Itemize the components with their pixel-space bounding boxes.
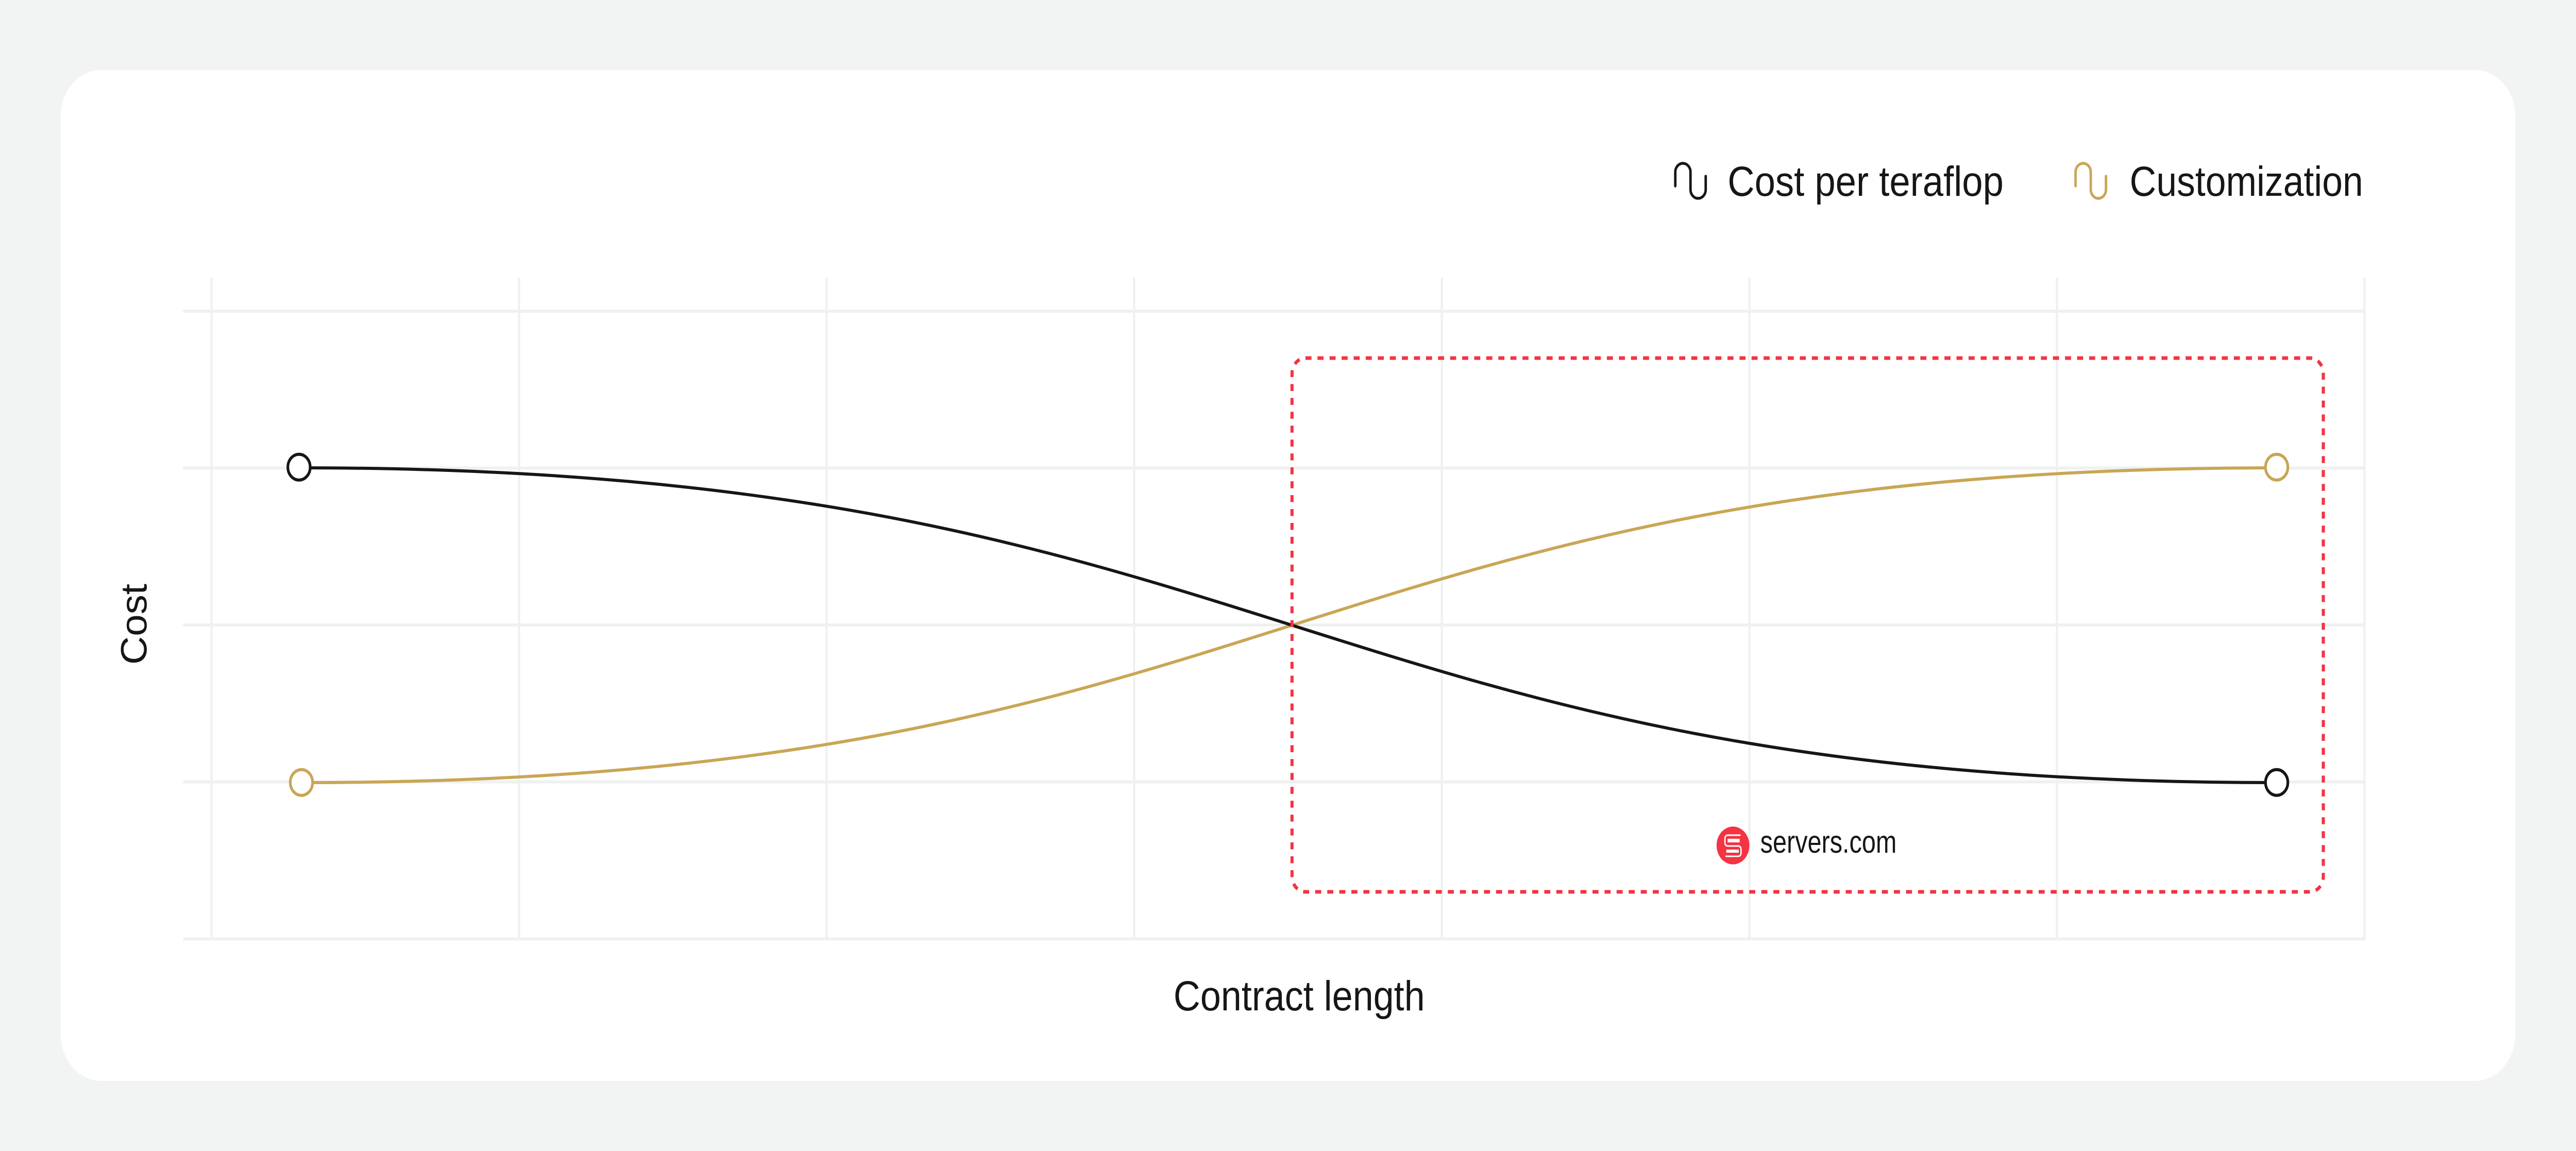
callout: dashed highlight box <box>1292 358 2324 892</box>
legend: cost per teraflop and customization <box>1675 158 2363 205</box>
legend label: customization: Customization <box>2130 158 2363 205</box>
icon: cost per teraflop line sample <box>1675 163 1706 198</box>
y axis label: Cost <box>114 584 155 665</box>
line: customization curve <box>290 454 2288 795</box>
logo: servers.com <box>1717 825 1896 865</box>
legend label: cost per teraflop: Cost per teraflop <box>1727 158 2004 205</box>
icon: servers.com mark <box>1717 826 1750 865</box>
logo text: servers.com <box>1760 825 1896 860</box>
icon: customization line sample <box>2076 163 2106 198</box>
line: cost per teraflop curve <box>288 454 2288 795</box>
x axis label: Contract length <box>1174 972 1425 1020</box>
